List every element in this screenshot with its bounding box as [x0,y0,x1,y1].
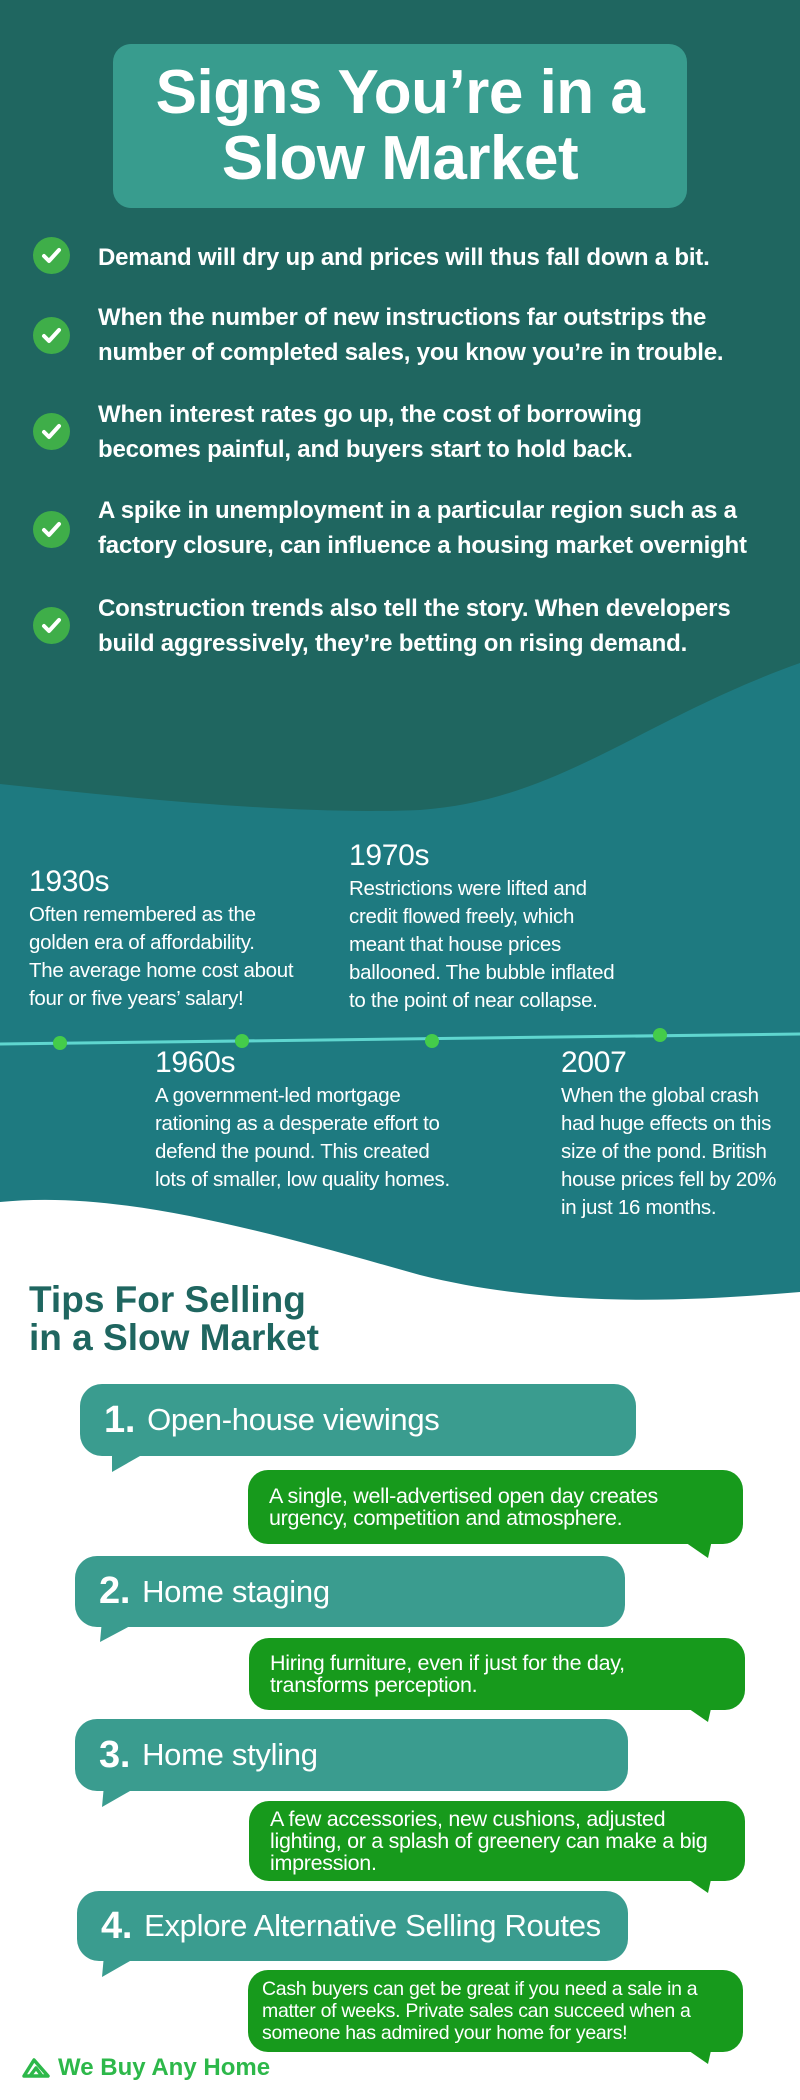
timeline: 1930s: 1930s [29,865,109,898]
sign 5: Construction trends also tell the story. When developers [98,595,730,622]
tip 1 heading: 1. [104,1398,135,1440]
icon: check 1 [33,237,70,274]
tip 4 heading: Explore Alternative Selling Routes [144,1908,601,1943]
timeline: 1970s: credit flowed freely, which [349,905,574,928]
timeline: 1930s: golden era of affordability. [29,931,255,954]
title: Signs You’re in a [156,58,644,127]
sign 3: When interest rates go up, the cost of borrowing [98,401,642,428]
timeline: 2007: When the global crash [561,1084,759,1107]
tip 4 heading: 4. [101,1904,132,1946]
tip 2 heading: Home staging [142,1574,330,1608]
timeline: 2007: size of the pond. British [561,1140,767,1163]
sign 3 [98,401,642,463]
timeline: 1960s: lots of smaller, low quality homes. [155,1168,450,1191]
bubble tails [100,1456,712,2064]
sign 1: Demand will dry up and prices will thus fall down a bit. [98,244,710,271]
sign 2: number of completed sales, you know you’re in trouble. [98,339,723,366]
sign 3: becomes painful, and buyers start to hold back. [98,436,633,463]
tip 3 heading: 3. [99,1734,130,1776]
tip 1 heading [80,1384,636,1456]
title [113,44,687,208]
timeline: 1970s [349,839,614,1012]
tip 4 text: matter of weeks. Private sales can succeed when a [262,2000,691,2022]
icon: check 2 [33,317,70,354]
tip 3 text [249,1801,745,1881]
signs list [33,237,747,657]
timeline: 1930s: The average home cost about [29,959,293,982]
logo: We Buy Any Home [58,2054,270,2081]
timeline: 1930s [29,865,294,1010]
sign 2: When the number of new instructions far outstrips the [98,304,706,331]
tip 1 text: urgency, competition and atmosphere. [269,1506,622,1530]
tip 4 text [248,1970,743,2052]
sign 5 [98,595,730,657]
tip 3 text: impression. [270,1851,377,1875]
sign 2 [98,304,723,366]
tip 3 text: A few accessories, new cushions, adjusted [270,1807,665,1831]
timeline: 2007: had huge effects on this [561,1112,771,1135]
timeline: 1960s: A government-led mortgage [155,1084,400,1107]
icon: check 4 [33,511,70,548]
sign 4 [98,497,747,559]
sign 4: A spike in unemployment in a particular region such as a [98,497,737,524]
timeline line with dots [0,1028,800,1050]
icon: check 3 [33,413,70,450]
tip 4 text: someone has admired your home for years! [262,2022,627,2044]
tip 3 text: lighting, or a splash of greenery can make a big [270,1829,707,1853]
tip 1 text [248,1470,743,1544]
timeline: 1960s: rationing as a desperate effort to [155,1112,440,1135]
timeline: 2007: house prices fell by 20% [561,1168,776,1191]
timeline: 1930s: four or five years’ salary! [29,987,243,1010]
tip 2 heading: 2. [99,1570,130,1612]
tip 2 text: Hiring furniture, even if just for the day, [270,1651,625,1675]
timeline: 1970s: 1970s [349,839,429,872]
timeline: 1970s: ballooned. The bubble inflated [349,961,614,984]
icon: house [22,2058,50,2078]
tip 2 text: transforms perception. [270,1673,477,1697]
timeline: 2007: 2007 [561,1046,627,1079]
tip 3 heading [75,1719,628,1791]
tips heading: in a Slow Market [29,1317,319,1358]
timeline: 1970s: Restrictions were lifted and [349,877,587,900]
tip 1 heading: Open-house viewings [147,1402,440,1437]
tip 3 heading: Home styling [142,1737,318,1772]
tip 1 text: A single, well-advertised open day creates [269,1484,658,1508]
sign 5: build aggressively, they’re betting on rising demand. [98,630,687,657]
tip 2 text [249,1638,745,1710]
tips heading [29,1279,319,1358]
timeline: 1970s: to the point of near collapse. [349,989,598,1012]
sign 4: factory closure, can influence a housing market overnight [98,532,747,559]
timeline: 2007: in just 16 months. [561,1196,716,1219]
tips heading: Tips For Selling [29,1279,306,1320]
tip 4 heading [77,1891,628,1961]
timeline: 1960s: 1960s [155,1046,235,1079]
timeline: 1930s: Often remembered as the [29,903,256,926]
title: Slow Market [222,124,578,193]
timeline: 1960s [155,1046,450,1191]
tip 2 heading [75,1556,625,1627]
icon: check 5 [33,607,70,644]
timeline: 1970s: meant that house prices [349,933,561,956]
timeline: 2007 [561,1046,776,1219]
timeline: 1960s: defend the pound. This created [155,1140,429,1163]
tip 4 text: Cash buyers can get be great if you need a sale in a [262,1978,697,2000]
